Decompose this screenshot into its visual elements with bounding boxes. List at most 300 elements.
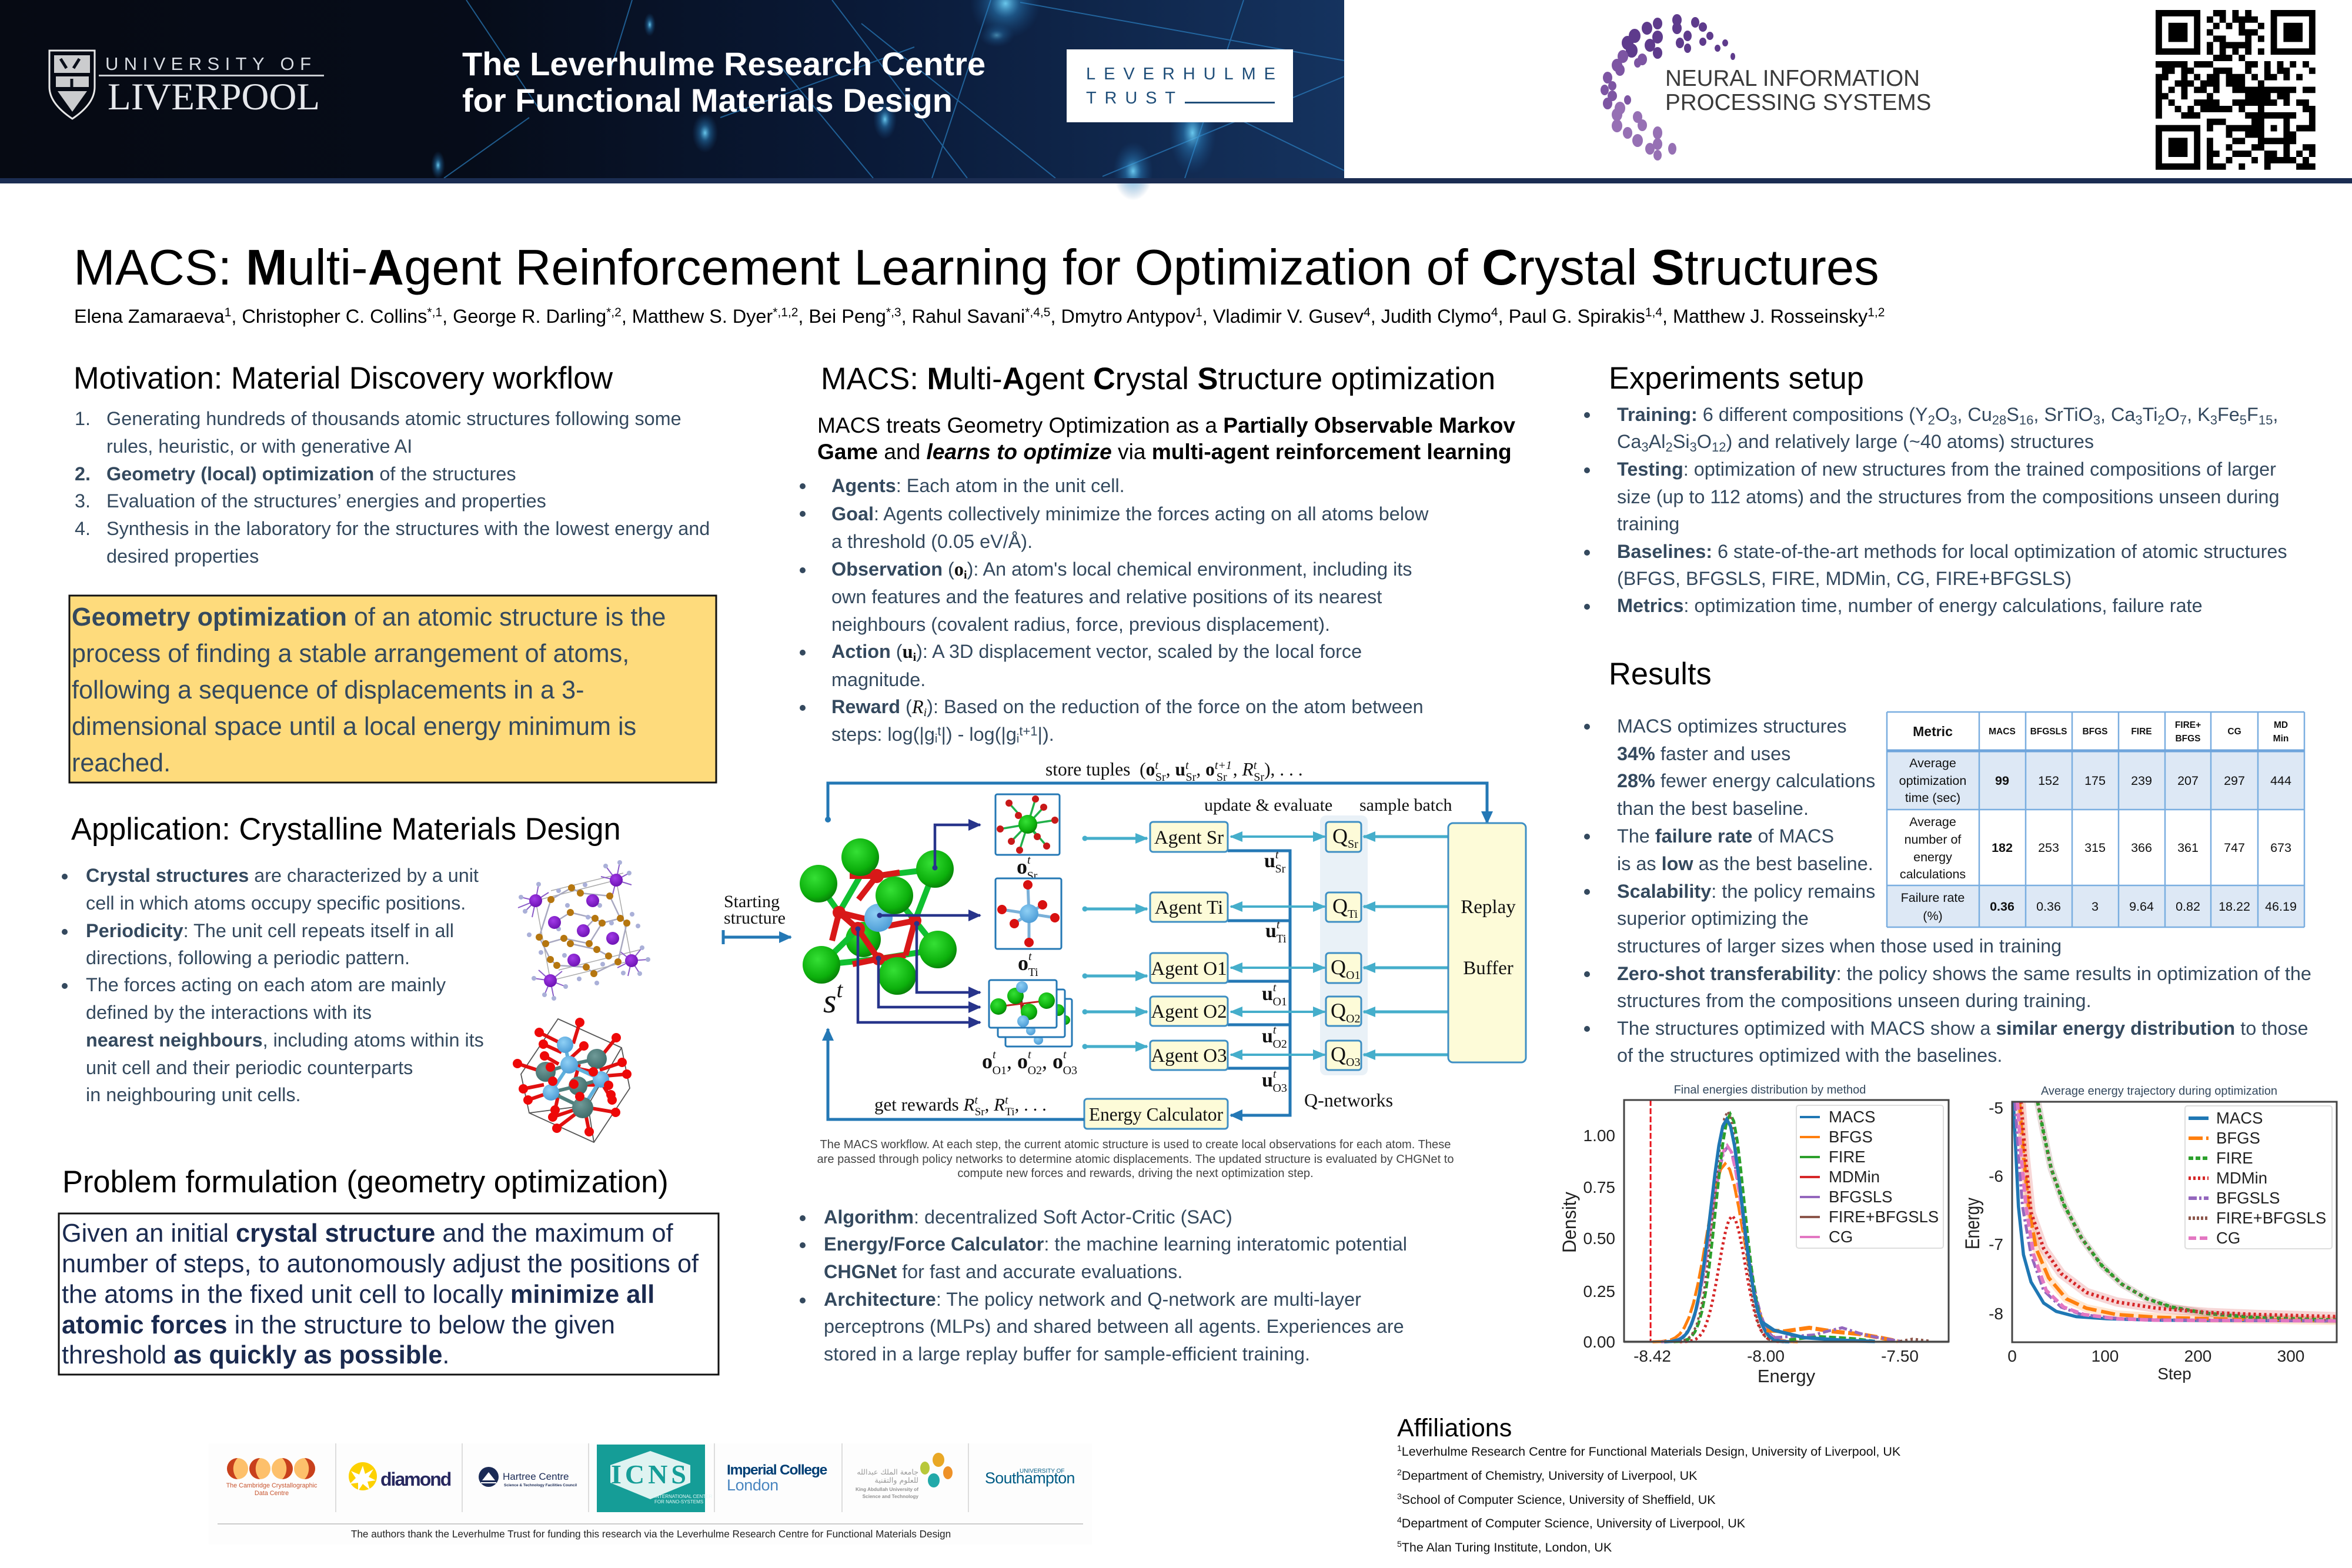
results table: energy bbox=[1913, 850, 1952, 864]
QR code bbox=[2156, 10, 2316, 170]
definitions bullets: steps: log(|g bbox=[831, 724, 935, 745]
action labels: t bbox=[1275, 848, 1279, 861]
legend: FIRE+BFGSLS bbox=[1829, 1208, 1939, 1226]
results table: 0.36 bbox=[1990, 900, 2014, 914]
results table: BFGSLS bbox=[2030, 727, 2067, 737]
definitions bullets: neighbours (covalent radius, force, previous displacement). bbox=[831, 614, 1330, 635]
definitions bullets: Reward (R bbox=[831, 696, 924, 718]
numbered workflow list: Evaluation of the structures’ energies and properties bbox=[106, 490, 546, 511]
label: o O1 O2 O3: O1 bbox=[993, 1064, 1007, 1077]
legend: MACS bbox=[1829, 1108, 1875, 1126]
results table: 361 bbox=[2177, 841, 2199, 855]
logo: ICNS: INTERNATIONAL CENTER bbox=[654, 1494, 712, 1499]
authors: , Bei Peng bbox=[798, 306, 886, 327]
legend: FIRE bbox=[1829, 1148, 1866, 1166]
results table: Metric bbox=[1913, 724, 1953, 739]
logo: University of Southampton: UNIVERSITY OF bbox=[1020, 1468, 1064, 1475]
chart title: Average energy trajectory during optimization bbox=[2041, 1085, 2277, 1098]
rewards label: t bbox=[1005, 1094, 1008, 1106]
definitions bullets: i bbox=[935, 733, 937, 745]
callout: geometry optimization: reached. bbox=[72, 749, 171, 777]
logo: Hartree Centre: Science & Technology Facilities Council bbox=[504, 1483, 577, 1487]
affiliations list: 4 bbox=[1397, 1515, 1402, 1524]
application bullets: nearest neighbours, including atoms within its bbox=[86, 1029, 484, 1051]
rewards label: Ti bbox=[1005, 1106, 1015, 1118]
authors: *,4,5 bbox=[1025, 306, 1050, 319]
results table: MD bbox=[2274, 720, 2288, 730]
title: MACS: Multi-Agent Reinforcement Learning for Optimization of Crystal Structures bbox=[74, 240, 1879, 296]
plot frame bbox=[2012, 1102, 2337, 1342]
experiments bullets: O bbox=[1935, 404, 1950, 425]
logo: Leverhulme Trust: TRUST bbox=[1086, 89, 1175, 108]
caption: compute new forces and rewards, driving the next optimization step. bbox=[957, 1167, 1314, 1180]
definitions bullets: ): Based on the reduction of the force on the atom between bbox=[927, 696, 1424, 717]
legend: BFGSLS bbox=[1829, 1188, 1893, 1206]
definitions bullets: Action (u bbox=[831, 641, 913, 663]
logo: University of Liverpool: LIVERPOOL bbox=[108, 76, 320, 118]
experiments bullets: Fe bbox=[2217, 404, 2240, 425]
experiments bullets: O bbox=[2165, 404, 2180, 425]
store tuples label: , bbox=[1233, 759, 1242, 780]
results table: 152 bbox=[2038, 774, 2059, 788]
numbered workflow list: desired properties bbox=[106, 546, 259, 567]
results table: 297 bbox=[2224, 774, 2245, 788]
experiments bullets: Testing: optimization of new structures from the trained compositions of larger bbox=[1617, 459, 2276, 480]
experiments bullets: Metrics: optimization time, number of energy calculations, failure rate bbox=[1617, 595, 2203, 616]
application bullets: defined by the interactions with its bbox=[86, 1002, 372, 1023]
experiments bullets: , SrTiO bbox=[2033, 404, 2093, 425]
caption bbox=[817, 1138, 1454, 1180]
affiliations list: 3 bbox=[1397, 1492, 1402, 1501]
Q-networks: Q bbox=[1331, 955, 1346, 979]
authors: *,1 bbox=[427, 306, 442, 319]
density plot curves bbox=[1624, 1100, 1949, 1342]
logo: Leverhulme Trust bbox=[1067, 49, 1293, 122]
problem statement box: threshold as quickly as possible. bbox=[62, 1341, 449, 1369]
experiments bullets: 3 bbox=[1641, 440, 1649, 454]
logo: ICNS: ICNS bbox=[611, 1459, 690, 1489]
action labels: O1 bbox=[1272, 995, 1287, 1008]
observation: Sr bbox=[995, 794, 1060, 855]
arrows: replay buffer to Q-networks bbox=[1364, 837, 1448, 1055]
logo: University of Liverpool: UNIVERSITY OF bbox=[105, 54, 311, 74]
experiments bullets: 2 bbox=[1928, 413, 1935, 427]
caption: are passed through policy networks to determine atomic displacements. The updated structure is evaluated by CHGNet to bbox=[817, 1153, 1454, 1166]
action labels: u bbox=[1264, 850, 1275, 872]
problem statement box: number of steps, to autonomously adjust the positions of bbox=[62, 1250, 699, 1278]
update and sample labels: update & evaluate bbox=[1204, 795, 1332, 815]
results table: number of bbox=[1905, 833, 1961, 847]
Q-networks label: Q-networks bbox=[1304, 1089, 1393, 1111]
arrow: starting structure bbox=[723, 930, 791, 944]
authors: *,3 bbox=[886, 306, 901, 319]
label: o Sr: o bbox=[1017, 855, 1027, 878]
rewards label: R bbox=[993, 1094, 1005, 1115]
y ticks: 0.25 bbox=[1583, 1282, 1615, 1300]
logo: Hartree Centre: Hartree Centre bbox=[503, 1471, 569, 1482]
authors: , George R. Darling bbox=[442, 306, 606, 327]
action labels: t bbox=[1273, 1024, 1277, 1037]
legend: FIRE+BFGSLS bbox=[2216, 1209, 2326, 1227]
energy calculator bbox=[1084, 1099, 1228, 1129]
authors: , Vladimir V. Gusev bbox=[1202, 306, 1364, 327]
lower method bullets: perceptrons (MLPs) and shared between all agents. Experiences are bbox=[824, 1316, 1404, 1337]
results table: 239 bbox=[2131, 774, 2152, 788]
store tuples label: Sr bbox=[1155, 771, 1166, 784]
results table: CG bbox=[2227, 727, 2241, 737]
affiliations list: 1 bbox=[1397, 1443, 1402, 1453]
definitions bullets: i bbox=[924, 706, 927, 719]
logo: ICNS: FOR NANO-SYSTEMS bbox=[654, 1499, 703, 1505]
acknowledgement rule bbox=[218, 1523, 1083, 1524]
application bullets: unit cell and their periodic counterparts bbox=[86, 1057, 413, 1078]
authors: , Rahul Savani bbox=[901, 306, 1025, 327]
y ticks bbox=[1583, 1126, 1615, 1351]
legend: BFGSLS bbox=[2216, 1189, 2280, 1207]
logo: University of Liverpool bbox=[49, 51, 324, 119]
results bullets: structures from the compositions unseen during training. bbox=[1617, 990, 2092, 1011]
store tuples label: , bbox=[1166, 759, 1175, 780]
centre name: The Leverhulme Research Centre bbox=[462, 45, 985, 82]
results table: FIRE bbox=[2131, 727, 2152, 737]
heading: application: Application: Crystalline Materials Design bbox=[71, 813, 621, 847]
heading: problem formulation: Problem formulation (geometry optimization) bbox=[62, 1165, 669, 1199]
x ticks: 0 bbox=[2007, 1347, 2017, 1365]
results bullets: than the best baseline. bbox=[1617, 798, 1809, 819]
results bullets: Zero-shot transferability: the policy shows the same results in optimization of the bbox=[1617, 963, 2311, 984]
results bullets bbox=[1584, 716, 2311, 1066]
logo: Hartree Centre bbox=[479, 1467, 577, 1487]
logo: Neural Information Processing Systems bbox=[1602, 15, 1931, 159]
callout: geometry optimization: dimensional space until a local energy minimum is bbox=[72, 713, 636, 741]
definitions bullets: t+1 bbox=[1019, 724, 1038, 738]
centre name: for Functional Materials Design bbox=[462, 82, 953, 119]
update and sample labels: sample batch bbox=[1359, 795, 1452, 815]
action labels: t bbox=[1273, 1068, 1277, 1081]
lower method bullets: Architecture: The policy network and Q-network are multi-layer bbox=[824, 1289, 1361, 1310]
experiments bullets: size (up to 112 atoms) and the structures from the compositions unseen during bbox=[1617, 486, 2279, 507]
experiments bullets: 16 bbox=[2019, 413, 2033, 427]
numbered workflow list: Geometry (local) optimization of the structures bbox=[106, 463, 516, 484]
application bullets: cell in which atoms occupy specific positions. bbox=[86, 892, 466, 914]
experiments bullets: Al bbox=[1649, 431, 1665, 452]
experiments bullets: 28 bbox=[1992, 413, 2006, 427]
results table: 175 bbox=[2084, 774, 2106, 788]
logo: KAUST: Science and Technology bbox=[863, 1494, 918, 1499]
intro statement: MACS treats Geometry Optimization as a Partially Observable Markov bbox=[817, 413, 1515, 437]
experiments bullets: training bbox=[1617, 513, 1679, 534]
Q-networks: O1 bbox=[1346, 969, 1360, 982]
experiments bullets: 3 bbox=[1950, 413, 1957, 427]
affiliations list: Department of Chemistry, University of Liverpool, UK bbox=[1402, 1469, 1698, 1483]
trajectory curves bbox=[2013, 1102, 2337, 1321]
authors: , Dmytro Antypov bbox=[1050, 306, 1196, 327]
logo: Imperial College London: London bbox=[727, 1476, 779, 1494]
results table: time (sec) bbox=[1905, 791, 1960, 805]
rewards label: , . . . bbox=[1015, 1094, 1047, 1115]
logo: University of Southampton: Southampton bbox=[985, 1469, 1075, 1487]
problem statement box bbox=[59, 1213, 719, 1375]
arrows: atoms to observations bbox=[858, 825, 980, 1022]
Q-networks: O2 bbox=[1346, 1012, 1360, 1025]
label: o O1 O2 O3: t bbox=[1028, 1048, 1031, 1061]
results table: Average bbox=[1909, 756, 1956, 770]
logo: CCDC: The Cambridge Crystallographic bbox=[226, 1482, 318, 1489]
definitions bullets: |) - log(|g bbox=[941, 724, 1017, 745]
logo: KAUST: جامعة الملك عبدالله bbox=[857, 1467, 918, 1476]
Q-networks: Q bbox=[1332, 894, 1348, 918]
affiliations list: 5 bbox=[1397, 1539, 1402, 1549]
callout: geometry optimization: process of finding a stable arrangement of atoms, bbox=[72, 640, 629, 668]
panel: problem formulation bbox=[59, 1165, 719, 1375]
arrow: rewards feedback bbox=[828, 1029, 1084, 1119]
header dark background bbox=[0, 0, 1344, 200]
logo: Neural Information Processing Systems: PROCESSING SYSTEMS bbox=[1665, 90, 1931, 115]
panel: experiments setup bbox=[1584, 362, 2287, 616]
panel: application bbox=[62, 813, 650, 1142]
y ticks: -8 bbox=[1989, 1305, 2003, 1323]
label: o O1 O2 O3: t bbox=[1063, 1048, 1067, 1061]
action labels: t bbox=[1277, 918, 1280, 931]
intro statement bbox=[817, 413, 1515, 464]
definitions bullets: Agents: Each atom in the unit cell. bbox=[831, 475, 1125, 496]
replay buffer: Buffer bbox=[1463, 958, 1514, 979]
problem statement box: the atoms in the fixed unit cell to locally minimize all bbox=[62, 1281, 654, 1309]
experiments bullets: 15 bbox=[2259, 413, 2273, 427]
crystal structure s^t bbox=[800, 838, 957, 995]
definitions bullets: Observation (o bbox=[831, 559, 964, 580]
action labels bbox=[1262, 848, 1287, 1095]
legend: MDMin bbox=[1829, 1168, 1880, 1186]
energy calculator: Energy Calculator bbox=[1089, 1104, 1224, 1125]
y ticks: -7 bbox=[1989, 1235, 2003, 1253]
application bullets: directions, following a periodic pattern. bbox=[86, 947, 410, 968]
x axis label: Energy bbox=[1758, 1366, 1816, 1386]
affiliations list: School of Computer Science, University of Sheffield, UK bbox=[1402, 1493, 1716, 1507]
x ticks: 200 bbox=[2184, 1347, 2211, 1365]
logo: Imperial College London: Imperial College bbox=[727, 1462, 827, 1478]
experiments bullets: , Cu bbox=[1957, 404, 1992, 425]
y ticks: 1.00 bbox=[1583, 1126, 1615, 1145]
experiments bullets: O bbox=[1697, 431, 1712, 452]
label: o O1 O2 O3: o bbox=[1053, 1049, 1063, 1073]
lower method bullets: Algorithm: decentralized Soft Actor-Critic (SAC) bbox=[824, 1206, 1232, 1228]
state symbol: s bbox=[823, 982, 837, 1020]
definitions bullets: ): A 3D displacement vector, scaled by the local force bbox=[916, 641, 1362, 662]
results table: FIRE+ bbox=[2175, 720, 2201, 730]
store tuples label: t bbox=[1155, 759, 1158, 772]
results table: (%) bbox=[1923, 909, 1943, 923]
store tuples label: t bbox=[1254, 759, 1257, 772]
results bullets: 28% fewer energy calculations bbox=[1617, 770, 1875, 791]
logo: Leverhulme Trust: LEVERHULME bbox=[1086, 65, 1275, 83]
store tuples label: t+1 bbox=[1215, 759, 1232, 772]
x axis label: Step bbox=[2157, 1365, 2191, 1383]
experiments bullets: 3 bbox=[2093, 413, 2100, 427]
experiments bullets: 3 bbox=[1690, 440, 1697, 454]
results table: 253 bbox=[2038, 841, 2059, 855]
experiments bullets bbox=[1584, 404, 2287, 616]
experiments bullets: (BFGS, BFGSLS, FIRE, MDMin, CG, FIRE+BFGSLS) bbox=[1617, 568, 2072, 589]
results table: 444 bbox=[2270, 774, 2291, 788]
results table: 315 bbox=[2084, 841, 2106, 855]
problem statement box: Given an initial crystal structure and the maximum of bbox=[62, 1219, 674, 1248]
definitions bullets: own features and the features and relative positions of its nearest bbox=[831, 586, 1382, 607]
action labels: Ti bbox=[1276, 932, 1287, 945]
heading: motivation: Motivation: Material Discovery workflow bbox=[74, 362, 613, 396]
logo: KAUST: للعلوم والتقنية bbox=[875, 1476, 918, 1485]
results table: Average bbox=[1909, 815, 1956, 829]
application bullets: in neighbouring unit cells. bbox=[86, 1084, 301, 1105]
lower method bullets: CHGNet for fast and accurate evaluations. bbox=[824, 1261, 1182, 1282]
results table: 0.82 bbox=[2176, 900, 2200, 914]
Q-networks: Q bbox=[1331, 1042, 1346, 1066]
plot frame bbox=[1624, 1100, 1949, 1342]
callout: geometry optimization: following a sequence of displacements in a 3- bbox=[72, 676, 584, 704]
y ticks: 0.50 bbox=[1583, 1229, 1615, 1248]
action labels: t bbox=[1273, 981, 1277, 994]
rewards label: get rewards R bbox=[874, 1094, 974, 1115]
logo: Neural Information Processing Systems: NEURAL INFORMATION bbox=[1665, 66, 1920, 91]
label: o O1 O2 O3: t bbox=[993, 1048, 996, 1061]
icon: red-teal crystal structure bbox=[513, 1018, 632, 1142]
action labels: u bbox=[1262, 1025, 1273, 1047]
agents: Agent Sr bbox=[1154, 827, 1224, 848]
logo: Diamond: diamond bbox=[380, 1469, 451, 1490]
legend bbox=[2185, 1106, 2332, 1249]
starting structure label: structure bbox=[724, 908, 786, 928]
panel: partner logos bbox=[209, 1443, 1092, 1544]
results table: 207 bbox=[2177, 774, 2199, 788]
legend: MDMin bbox=[2216, 1169, 2267, 1187]
definitions bullets: t bbox=[937, 724, 941, 738]
store tuples label: o bbox=[1205, 759, 1215, 780]
experiments bullets: 5 bbox=[2240, 413, 2247, 427]
intro statement: Game and learns to optimize via multi-agent reinforcement learning bbox=[817, 439, 1512, 464]
results bullets: superior optimizing the bbox=[1617, 908, 1809, 929]
results table: Min bbox=[2273, 734, 2288, 744]
authors: , Paul G. Spirakis bbox=[1498, 306, 1645, 327]
affiliations list: Department of Computer Science, University of Liverpool, UK bbox=[1402, 1516, 1746, 1530]
legend: BFGS bbox=[2216, 1129, 2260, 1147]
action output lines bbox=[1228, 851, 1290, 1115]
results bullets: of the structures optimized with the baselines. bbox=[1617, 1045, 2002, 1066]
label: o Ti: Ti bbox=[1028, 966, 1038, 979]
application bullets: Crystal structures are characterized by a unit bbox=[86, 865, 479, 886]
results table: BFGS bbox=[2175, 734, 2201, 744]
lower method bullets: Energy/Force Calculator: the machine learning interatomic potential bbox=[824, 1233, 1407, 1255]
legend: MACS bbox=[2216, 1109, 2263, 1127]
experiments bullets: F bbox=[2247, 404, 2259, 425]
x ticks: -8.00 bbox=[1747, 1347, 1785, 1365]
results table: 99 bbox=[1995, 774, 2009, 788]
results table: calculations bbox=[1900, 867, 1966, 881]
lower method bullets: stored in a large replay buffer for sample-efficient training. bbox=[824, 1343, 1310, 1365]
replay buffer bbox=[1448, 823, 1526, 1062]
results table: optimization bbox=[1899, 774, 1966, 788]
definitions bullets: ): An atom's local chemical environment, including its bbox=[967, 559, 1412, 580]
experiments bullets: , bbox=[2273, 404, 2278, 425]
experiments bullets: ) and relatively large (~40 atoms) structures bbox=[1726, 431, 2094, 452]
chart: average energy trajectory bbox=[1962, 1085, 2337, 1383]
store tuples label: Sr bbox=[1254, 771, 1264, 784]
action labels: u bbox=[1265, 920, 1277, 942]
x ticks bbox=[1633, 1347, 1919, 1365]
affiliations list bbox=[1397, 1443, 1901, 1554]
logos background bbox=[209, 1443, 1092, 1544]
store tuples label: R bbox=[1241, 759, 1254, 780]
experiments bullets: , Ca bbox=[2100, 404, 2136, 425]
results bullets: 34% faster and uses bbox=[1617, 743, 1790, 764]
experiments bullets: Training: 6 different compositions (Y bbox=[1617, 404, 1928, 425]
results bullets: Scalability: the policy remains bbox=[1617, 881, 1875, 902]
results table: 747 bbox=[2224, 841, 2245, 855]
caption: The MACS workflow. At each step, the current atomic structure is used to create local observations for each atom. These bbox=[820, 1138, 1451, 1151]
affiliations list: The Alan Turing Institute, London, UK bbox=[1402, 1540, 1612, 1554]
y ticks: 0.75 bbox=[1583, 1178, 1615, 1196]
results bullets: The structures optimized with MACS show a similar energy distribution to those bbox=[1617, 1018, 2308, 1039]
label: o O1 O2 O3: o bbox=[982, 1049, 993, 1073]
label: o Ti: o bbox=[1018, 951, 1028, 975]
affiliations list: 2 bbox=[1397, 1467, 1402, 1477]
logo: ICNS bbox=[597, 1445, 712, 1512]
Q-networks bbox=[1326, 822, 1361, 1070]
agents: Agent Ti bbox=[1155, 897, 1223, 918]
store tuples label: t bbox=[1185, 759, 1189, 772]
authors: , Christopher C. Collins bbox=[231, 306, 427, 327]
x ticks bbox=[2007, 1347, 2304, 1365]
store tuples label: Sr bbox=[1217, 771, 1227, 784]
logo: CCDC: Data Centre bbox=[255, 1490, 289, 1497]
results table: Failure rate bbox=[1901, 891, 1965, 905]
authors: *,1,2 bbox=[773, 306, 798, 319]
x ticks: 300 bbox=[2277, 1347, 2304, 1365]
starting structure label bbox=[724, 892, 786, 928]
definitions bullets: |). bbox=[1038, 724, 1054, 745]
numbered workflow list: Synthesis in the laboratory for the structures with the lowest energy and bbox=[106, 518, 710, 539]
authors: *,2 bbox=[606, 306, 622, 319]
experiments bullets: S bbox=[2006, 404, 2019, 425]
heading: results: Results bbox=[1609, 657, 1712, 691]
experiments bullets: 12 bbox=[1712, 440, 1726, 454]
results table: 0.36 bbox=[2036, 900, 2061, 914]
authors: 1 bbox=[1195, 306, 1202, 319]
observations: O1 O2 O3 stack bbox=[989, 980, 1072, 1047]
lower method bullets bbox=[800, 1206, 1407, 1365]
logo: Imperial College London bbox=[727, 1462, 827, 1494]
definitions bullets: i bbox=[1017, 733, 1019, 745]
legend: FIRE bbox=[2216, 1149, 2253, 1167]
chart: final energies distribution bbox=[1559, 1084, 1949, 1386]
action labels: O2 bbox=[1272, 1038, 1287, 1051]
experiments bullets: 7 bbox=[2180, 413, 2187, 427]
authors: 1,4 bbox=[1645, 306, 1662, 319]
icon: purple-orange crystal structure bbox=[518, 860, 650, 1001]
label: o O1 O2 O3: O3 bbox=[1063, 1064, 1077, 1077]
x ticks: -8.42 bbox=[1633, 1347, 1671, 1365]
experiments bullets: Si bbox=[1673, 431, 1690, 452]
label: o O1 O2 O3: O2 bbox=[1028, 1064, 1042, 1077]
numbered workflow list: 2. bbox=[75, 463, 91, 484]
y ticks: -6 bbox=[1989, 1167, 2003, 1185]
results table: MACS bbox=[1989, 727, 2016, 737]
legend: CG bbox=[1829, 1228, 1853, 1246]
definitions bullets: Goal: Agents collectively minimize the forces acting on all atoms below bbox=[831, 503, 1429, 524]
update and sample labels bbox=[1204, 795, 1452, 815]
Q-networks background band bbox=[1320, 815, 1368, 1075]
label: o Ti: t bbox=[1028, 950, 1032, 963]
heading: experiments: Experiments setup bbox=[1609, 362, 1864, 396]
